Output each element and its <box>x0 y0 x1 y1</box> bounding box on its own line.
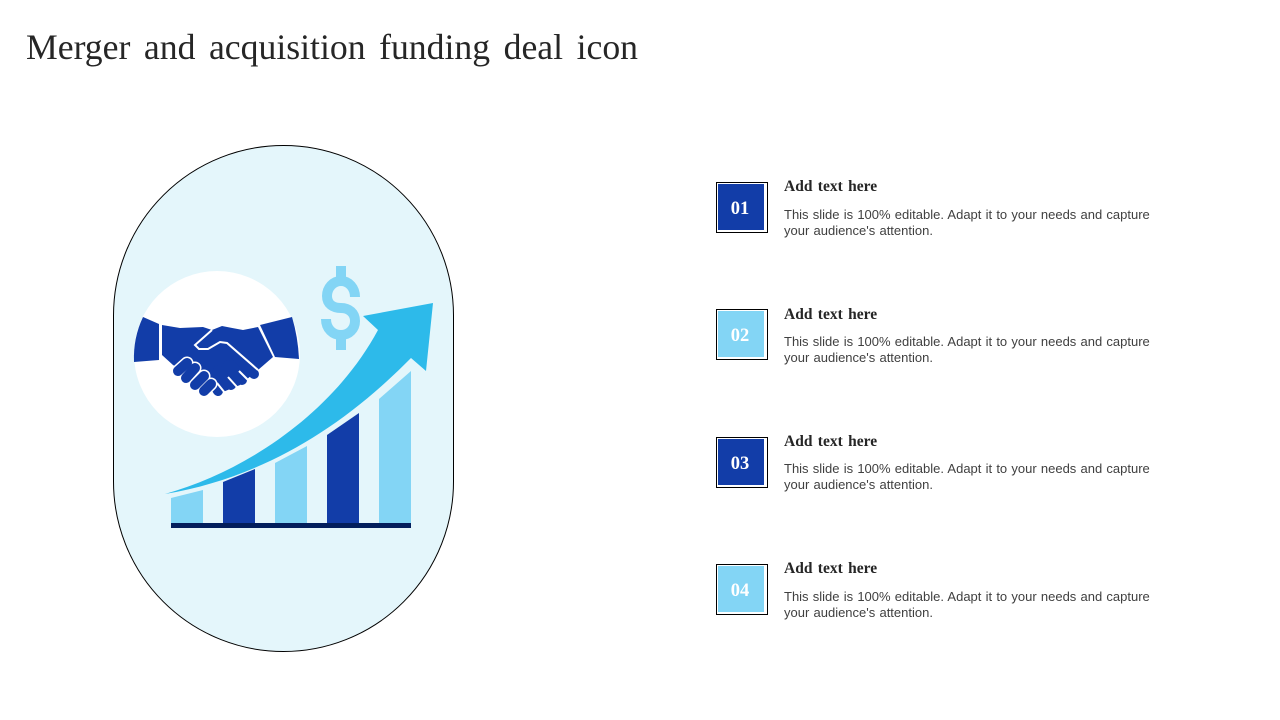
item text 03: your audience's attention. <box>784 477 933 492</box>
item heading 02: Add text here <box>784 306 877 323</box>
number badge 03: 03 <box>731 454 749 474</box>
number badge 03 <box>716 437 768 488</box>
number badge 01: 01 <box>731 199 749 219</box>
item text 02 <box>784 334 1150 365</box>
capsule panel <box>114 146 454 652</box>
item 03 <box>716 433 1150 492</box>
icon: dollar sign <box>326 266 355 350</box>
item text 03 <box>784 461 1150 492</box>
item heading 01: Add text here <box>784 178 877 195</box>
item text 02: your audience's attention. <box>784 350 933 365</box>
item text 01 <box>784 207 1150 238</box>
number badge 02: 02 <box>731 326 749 346</box>
item text 03: This slide is 100% editable. Adapt it to your needs and capture <box>784 461 1150 476</box>
item heading 03: Add text here <box>784 433 877 450</box>
number badge 01 <box>716 182 768 233</box>
bar chart <box>171 371 411 528</box>
item heading 04: Add text here <box>784 560 877 577</box>
item text 04: your audience's attention. <box>784 605 933 620</box>
item text 04: This slide is 100% editable. Adapt it to your needs and capture <box>784 589 1150 604</box>
number badge 04 <box>716 564 768 615</box>
number badge 02 <box>716 309 768 360</box>
item 04 <box>716 560 1150 620</box>
title: Merger and acquisition funding deal icon <box>26 27 638 67</box>
number badge 04: 04 <box>731 581 749 601</box>
item text 01: This slide is 100% editable. Adapt it to your needs and capture <box>784 207 1150 222</box>
item text 02: This slide is 100% editable. Adapt it to your needs and capture <box>784 334 1150 349</box>
item text 01: your audience's attention. <box>784 223 933 238</box>
icon: handshake in white circle <box>134 271 300 437</box>
item 01 <box>716 178 1150 238</box>
arrow: growth <box>165 303 433 494</box>
item text 04 <box>784 589 1150 620</box>
item 02 <box>716 306 1150 365</box>
